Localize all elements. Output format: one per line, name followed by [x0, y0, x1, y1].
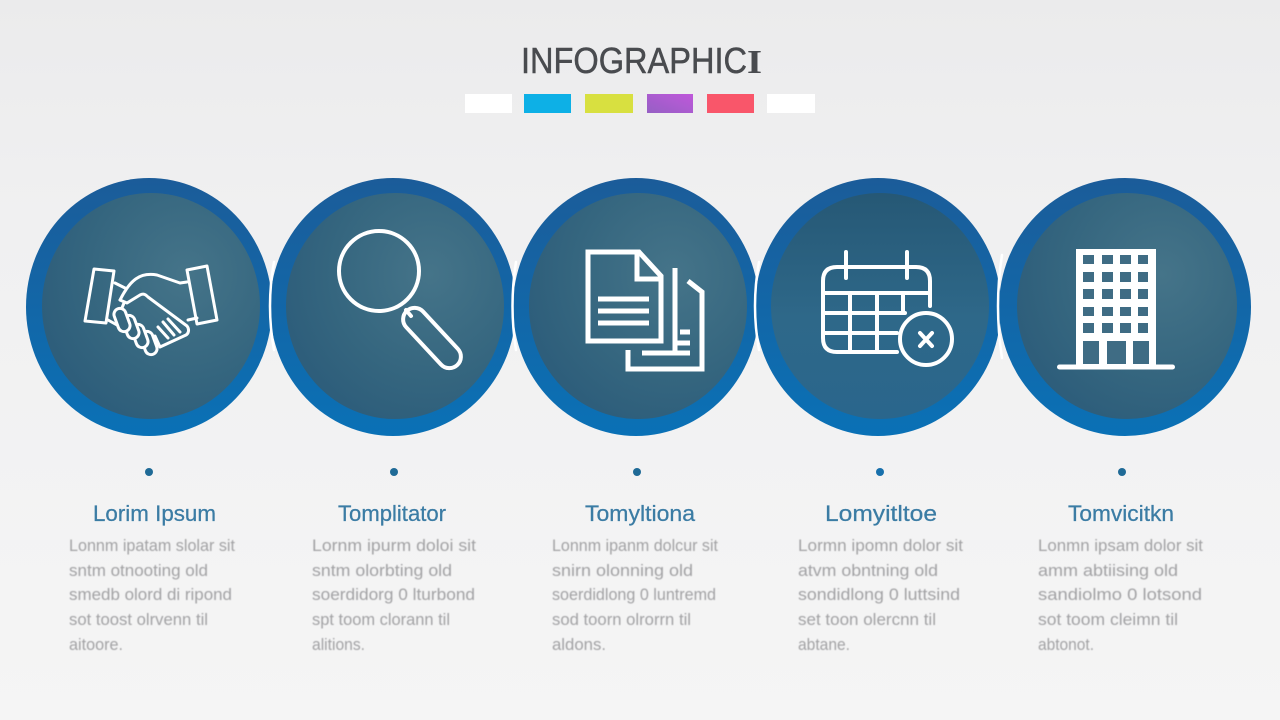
- column text: step 2: spt toom clorann til: [312, 611, 450, 629]
- column text: step 3: sod toorn olrorrn til: [552, 611, 691, 629]
- column text: step 5: Tomvicitkn: [1068, 501, 1174, 526]
- column text: step 3: Lonnm ipanm dolcur sit: [552, 537, 718, 555]
- column text: step 2: Lornm ipurm doloi sit: [312, 537, 476, 555]
- panel: step 3 circle: [513, 178, 759, 436]
- column text: step 3: snirn olonning old: [552, 562, 693, 580]
- icon: documents: [588, 252, 702, 369]
- column text: step 1: sntm otnooting old: [69, 562, 208, 580]
- icon: magnifying glass: [339, 231, 466, 373]
- panel: step 1 circle: [26, 178, 272, 436]
- title: I: [747, 44, 762, 81]
- colour swatch row: [465, 94, 815, 113]
- column text: step 3: [552, 468, 718, 654]
- column text: step 4: abtane.: [798, 636, 850, 654]
- column text: step 1: sot toost olrvenn til: [69, 611, 208, 629]
- column text: step 5: Lonmn ipsam dolor sit: [1038, 537, 1203, 555]
- column text: step 2: Tomplitator: [338, 501, 446, 526]
- column text: step 2: alitions.: [312, 636, 365, 654]
- panel: step 2 circle: [270, 178, 516, 436]
- column text: step 2: soerdidorg 0 lturbond: [312, 586, 475, 604]
- icon: calendar with cross: [823, 252, 952, 365]
- column text: step 4: sondidlong 0 luttsind: [798, 586, 960, 604]
- icon: office building: [1057, 249, 1175, 370]
- column text: step 5: amm abtiising old: [1038, 562, 1178, 580]
- column text: step 5: sandiolmo 0 lotsond: [1038, 586, 1202, 604]
- icon: handshake: [85, 266, 217, 356]
- column text: step 4: atvm obntning old: [798, 562, 938, 580]
- column text: step 3: Tomyltiona: [585, 501, 696, 526]
- column text: step 5: [1038, 468, 1203, 654]
- column text: step 3: soerdidlong 0 luntremd: [552, 586, 716, 604]
- column text: step 3: aldons.: [552, 636, 606, 654]
- column text: step 5: sot toom cleimn til: [1038, 611, 1178, 629]
- panel: step 4 circle: [755, 178, 1001, 436]
- column text: step 2: sntm olorbting old: [312, 562, 452, 580]
- column text: step 1: [69, 468, 235, 654]
- column text: step 4: Lormn ipomn dolor sit: [798, 537, 963, 555]
- column text: step 2: [312, 468, 476, 654]
- column text: step 4: Lomyitltoe: [825, 501, 937, 526]
- column text: step 4: [798, 468, 963, 654]
- white separators between circles: [270, 255, 1002, 358]
- column text: step 4: set toon olercnn til: [798, 611, 936, 629]
- column text: step 1: aitoore.: [69, 636, 123, 654]
- column text: step 1: Lonnm ipatam slolar sit: [69, 537, 235, 555]
- panel: step 5 circle: [999, 178, 1251, 436]
- column text: step 1: smedb olord di ripond: [69, 586, 232, 604]
- title: INFOGRAPHIC: [521, 40, 747, 81]
- column text: step 5: abtonot.: [1038, 636, 1094, 654]
- column text: step 1: Lorim Ipsum: [93, 501, 216, 526]
